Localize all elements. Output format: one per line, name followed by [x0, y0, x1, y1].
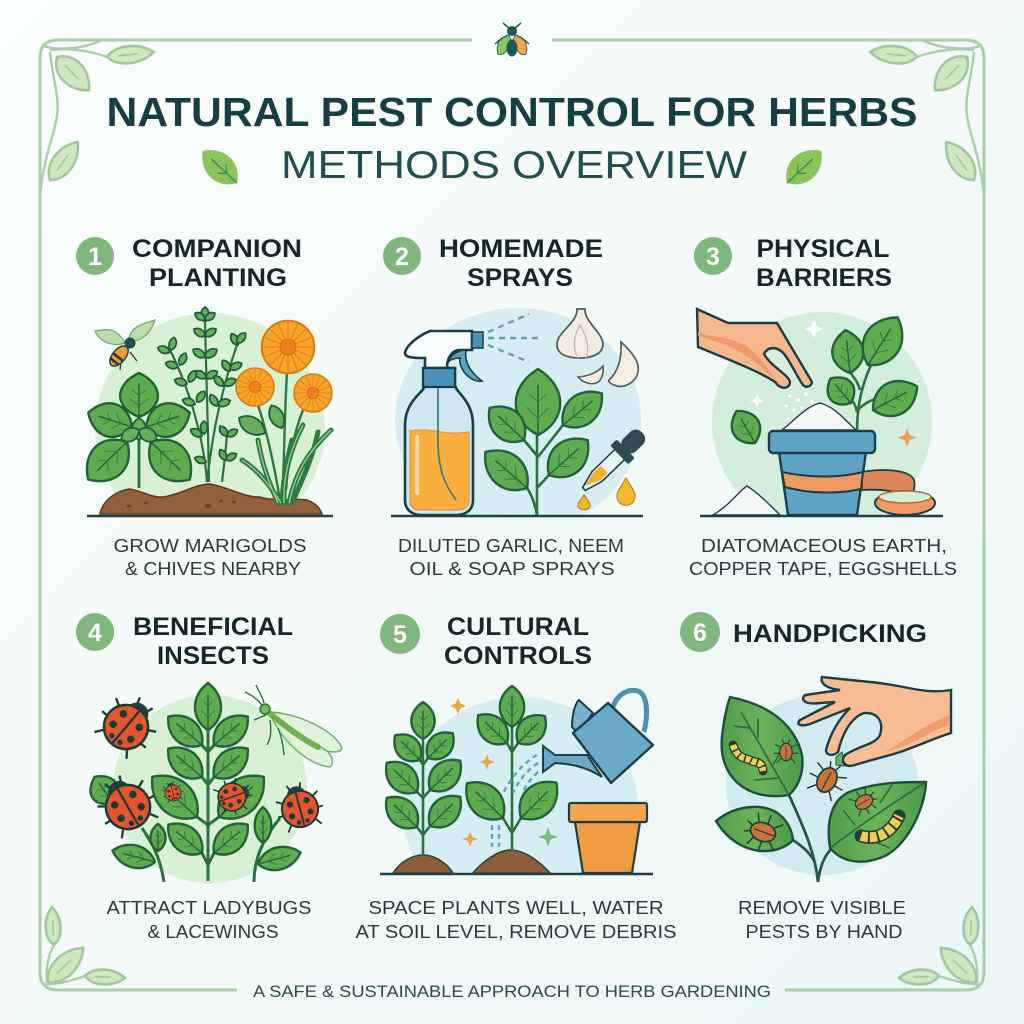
caption 2: DILUTED GARLIC, NEEM: [398, 536, 624, 556]
icon: small plant: [378, 702, 469, 837]
caption 4: ATTRACT LADYBUGS: [106, 898, 312, 918]
icon: plant: [475, 369, 611, 515]
top-left corner vine: [40, 41, 155, 195]
illustration: herbs and marigolds: [86, 306, 334, 518]
subtitle: METHODS OVERVIEW: [281, 144, 747, 187]
icon: picking hand: [798, 677, 951, 766]
number badge 3: 3: [706, 243, 720, 271]
title: NATURAL PEST CONTROL FOR HERBS: [106, 89, 917, 135]
panel: homemade sprays: [383, 235, 651, 532]
icon: tall plant: [456, 686, 567, 829]
illustration: hand removing pests: [716, 677, 951, 882]
icon: upper leaf: [722, 697, 802, 796]
caption 3: DIATOMACEOUS EARTH,: [701, 536, 947, 556]
icon: lower right leaf: [829, 782, 926, 862]
panel: cultural controls: [380, 614, 654, 876]
number badge 5: [380, 614, 420, 654]
panel: physical barriers: [694, 235, 943, 532]
caption 3: COPPER TAPE, EGGSHELLS: [689, 559, 957, 579]
heading 3: BARRIERS: [756, 264, 892, 292]
top-right corner vine: [869, 41, 984, 195]
heading 1: COMPANION: [132, 235, 302, 263]
icon: garlic: [557, 309, 638, 386]
heading 1: PLANTING: [149, 264, 287, 292]
illustration: spray bottle and plant: [391, 308, 651, 532]
number badge 4: [76, 613, 114, 651]
icon: terracotta pot: [569, 803, 647, 873]
caption 1: & CHIVES NEARBY: [125, 559, 301, 579]
heading 4: BENEFICIAL: [133, 613, 293, 641]
icon: blue pot: [769, 431, 935, 515]
number badge 6: 6: [693, 619, 707, 647]
caption 6: PESTS BY HAND: [746, 922, 902, 942]
caption 5: SPACE PLANTS WELL, WATER: [368, 898, 664, 918]
heading 2: SPRAYS: [467, 264, 573, 292]
icon: caterpillars: [733, 745, 763, 771]
number badge 5: 5: [393, 621, 407, 649]
heading 6: HANDPICKING: [733, 620, 927, 648]
bottom-right corner vine: [899, 907, 983, 989]
icon: central plant: [141, 683, 275, 881]
number badge 4: 4: [88, 619, 102, 647]
illustration: spaced plants and watering: [380, 684, 654, 876]
number badge 6: [680, 612, 720, 652]
icon: beetles: [774, 740, 798, 763]
heading 5: CONTROLS: [444, 642, 592, 670]
number badge 1: 1: [88, 243, 102, 271]
panel: handpicking: [680, 612, 951, 882]
number badge 2: [383, 237, 421, 275]
panel: beneficial insects: [76, 613, 342, 883]
number badge 2: 2: [395, 243, 409, 271]
icon: lower left leaf: [716, 807, 793, 851]
caption 1: GROW MARIGOLDS: [114, 536, 306, 556]
icon: ladybugs: [89, 685, 168, 764]
footer tagline: A SAFE & SUSTAINABLE APPROACH TO HERB GARDENING: [253, 982, 771, 1001]
caption 2: OIL & SOAP SPRAYS: [410, 559, 614, 579]
icon: watering can: [543, 690, 653, 783]
icon: right leaf: [778, 141, 831, 193]
icon: left leaf: [193, 141, 246, 193]
bottom-left corner vine: [41, 907, 125, 989]
caption 6: REMOVE VISIBLE: [738, 898, 906, 918]
heading 5: CULTURAL: [447, 613, 589, 641]
icon: firefly at top of frame: [495, 23, 529, 56]
illustration: pot with barriers: [697, 308, 943, 532]
icon: plant: [820, 308, 925, 432]
icon: lacewing: [245, 685, 342, 767]
panel: companion planting: [75, 235, 333, 543]
icon: spray bottle: [405, 331, 483, 515]
number badge 3: [694, 237, 732, 275]
caption 5: AT SOIL LEVEL, REMOVE DEBRIS: [356, 922, 676, 942]
illustration: plant with ladybugs: [83, 683, 342, 883]
icon: bee: [95, 320, 155, 370]
icon: dropper: [575, 423, 651, 510]
icon: hand sprinkling powder: [697, 309, 812, 388]
number badge 1: [76, 237, 114, 275]
heading 4: INSECTS: [157, 642, 269, 670]
heading 2: HOMEMADE: [439, 235, 603, 263]
caption 4: & LACEWINGS: [148, 922, 278, 942]
heading 3: PHYSICAL: [756, 235, 890, 263]
icon: powder piles: [782, 403, 856, 430]
